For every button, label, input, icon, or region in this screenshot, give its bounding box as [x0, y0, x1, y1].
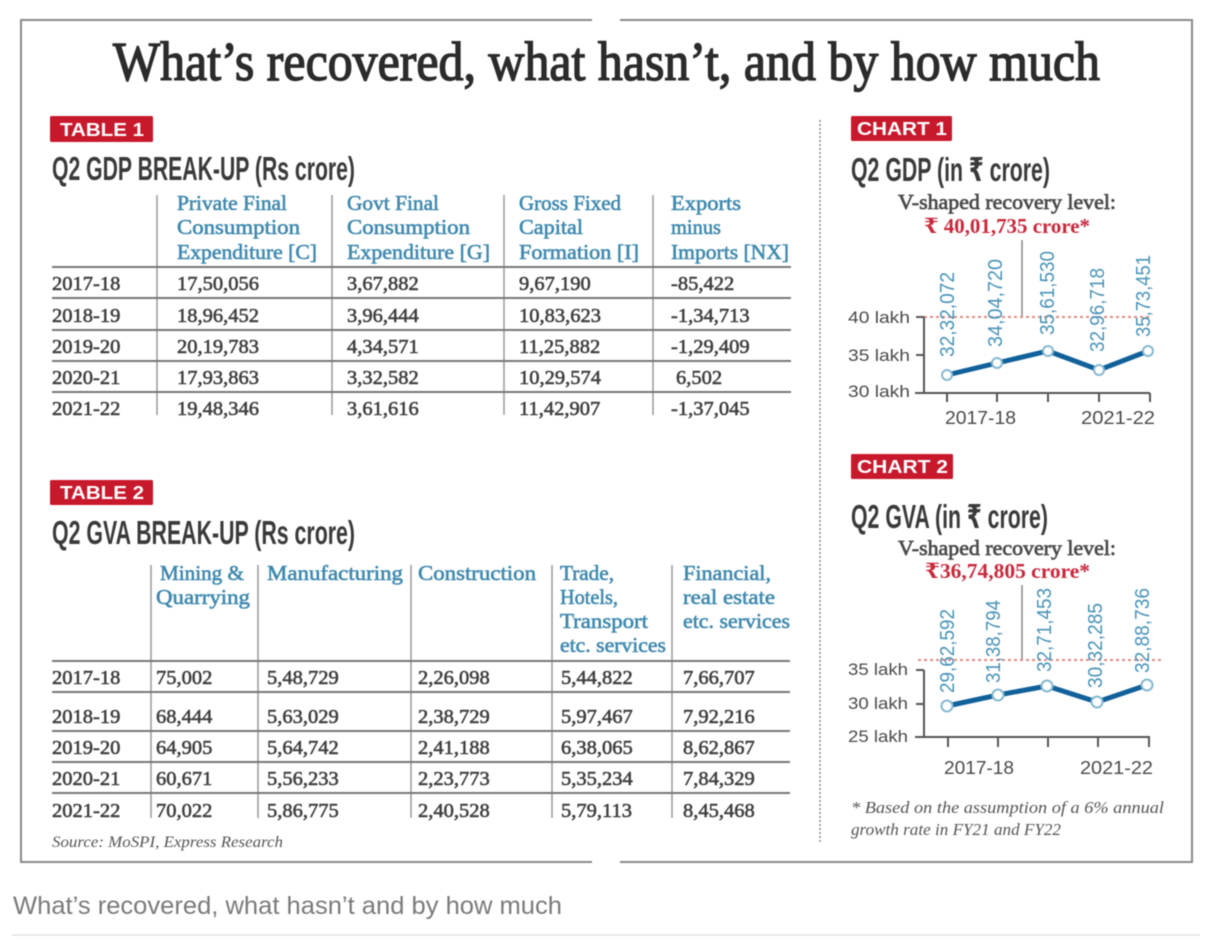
row: 2020-21: 6,502	[676, 367, 722, 389]
row: 2020-21: 17,93,863	[177, 367, 259, 389]
row: 2020-21: 10,29,574	[519, 367, 601, 389]
row: 2019-20: 20,19,783	[177, 336, 259, 358]
line chart: Q2 GDP: 2017-18	[945, 408, 1016, 428]
column headers: Consumption	[177, 215, 301, 239]
row: 2020-21: 7,84,329	[683, 768, 755, 790]
column headers: Mining &	[160, 561, 244, 585]
row: 2019-20: 64,905	[156, 737, 212, 759]
column headers: etc. services	[560, 633, 666, 657]
row: 2019-20: 11,25,882	[519, 336, 600, 358]
line chart: Q2 GDP: 30 lakh	[848, 382, 910, 401]
callout: recovery level	[898, 190, 1150, 317]
row: 2021-22: 5,86,775	[267, 800, 339, 822]
callout: recovery level: V-shaped recovery level:	[898, 536, 1116, 560]
row: 2019-20: 2019-20	[52, 737, 120, 759]
heading: chart 1: Q2 GDP (in ₹ crore)	[851, 151, 1050, 188]
row: 2018-19	[52, 706, 755, 728]
badge: table 2	[50, 480, 153, 505]
column headers: minus	[671, 215, 721, 239]
row: 2017-18: 2,26,098	[418, 667, 490, 689]
row: 2017-18: 17,50,056	[177, 273, 259, 295]
row: 2021-22: 2021-22	[52, 398, 120, 420]
column headers: Govt Final	[347, 191, 439, 215]
callout: recovery level	[898, 536, 1163, 660]
row: 2018-19	[52, 305, 750, 327]
row: 2021-22: 2021-22	[52, 800, 120, 822]
column headers: real estate	[683, 585, 775, 609]
column headers: Expenditure [C]	[177, 240, 317, 264]
column headers: Imports [NX]	[671, 240, 789, 264]
row: 2020-21: 2,23,773	[418, 768, 490, 790]
line chart: Q2 GVA: 25 lakh	[848, 727, 908, 746]
column headers: Quarrying	[156, 585, 251, 609]
line chart: Q2 GVA: 32,88,736	[1132, 588, 1154, 673]
column headers	[156, 561, 790, 657]
badge: chart 2	[851, 454, 953, 479]
row: 2018-19: 7,92,216	[683, 706, 755, 728]
row: 2021-22: 2,40,528	[418, 800, 490, 822]
row: 2019-20: 4,34,571	[347, 336, 419, 358]
footnote: * Based on the assumption of a 6% annual	[851, 798, 1164, 817]
row: 2017-18: 7,66,707	[683, 667, 755, 689]
footnote: growth rate in FY21 and FY22	[851, 820, 1061, 839]
row: 2019-20: 8,62,867	[683, 737, 755, 759]
row: 2019-20: 5,64,742	[267, 737, 339, 759]
row: 2021-22: 8,45,468	[683, 800, 755, 822]
line chart: Q2 GVA: 31,38,794	[983, 600, 1005, 683]
column headers: Financial,	[683, 561, 771, 585]
column headers: etc. services	[683, 609, 790, 633]
line chart: Q2 GVA: 30,32,285	[1085, 603, 1107, 688]
title: What’s recovered, what hasn’t, and by how much	[113, 31, 1100, 92]
row: 2017-18: 2017-18	[52, 667, 120, 689]
panel: chart 2	[848, 454, 1164, 839]
column headers: Manufacturing	[267, 561, 404, 585]
row: 2019-20: 2,41,188	[418, 737, 490, 759]
row: 2021-22: 19,48,346	[177, 398, 259, 420]
heading: table 2: Q2 GVA BREAK-UP (Rs crore)	[52, 514, 355, 551]
row: 2018-19: 68,444	[156, 706, 212, 728]
panel: table 1	[50, 116, 791, 420]
row: 2018-19: -1,34,713	[671, 305, 750, 327]
column headers: Transport	[560, 609, 648, 633]
row: 2018-19: 2,38,729	[418, 706, 490, 728]
badge: chart 2: CHART 2	[857, 457, 948, 477]
badge: chart 1	[851, 116, 952, 141]
footnote	[851, 798, 1164, 839]
row: 2017-18: 3,67,882	[347, 273, 419, 295]
column headers: Expenditure [G]	[347, 240, 490, 264]
row: 2020-21: 5,56,233	[267, 768, 339, 790]
column headers: Exports	[671, 191, 741, 215]
row: 2019-20	[52, 336, 750, 358]
heading: table 1: Q2 GDP BREAK-UP (Rs crore)	[52, 150, 355, 187]
row: 2020-21: 2020-21	[52, 367, 120, 389]
line chart: Q2 GVA: 35 lakh	[848, 660, 908, 679]
line chart: Q2 GVA: 32,71,453	[1034, 588, 1056, 672]
column headers: Private Final	[177, 191, 287, 215]
row: 2019-20: 2019-20	[52, 336, 120, 358]
callout: recovery level: ₹ 40,01,735 crore*	[924, 214, 1090, 238]
line chart: Q2 GDP: 40 lakh	[848, 308, 910, 327]
row: 2021-22: 70,022	[156, 800, 212, 822]
row: 2019-20	[52, 737, 755, 759]
line chart: Q2 GDP	[848, 251, 1155, 428]
row: 2017-18	[52, 667, 755, 689]
heading: chart 2: Q2 GVA (in ₹ crore)	[851, 498, 1048, 535]
row: 2018-19: 10,83,623	[519, 305, 601, 327]
row: 2020-21	[52, 768, 755, 790]
row: 2019-20: 6,38,065	[561, 737, 633, 759]
row: 2020-21: 2020-21	[52, 768, 120, 790]
panel: chart 1	[848, 116, 1155, 428]
row: 2018-19: 5,97,467	[561, 706, 633, 728]
source note: Source: MoSPI, Express Research	[52, 834, 283, 851]
column headers: Trade,	[560, 561, 614, 585]
line chart: Q2 GDP: 35 lakh	[848, 346, 910, 365]
row: 2017-18: 9,67,190	[519, 273, 591, 295]
row: 2018-19: 18,96,452	[177, 305, 259, 327]
callout: recovery level: ₹36,74,805 crore*	[925, 559, 1090, 583]
row: 2021-22	[52, 800, 755, 822]
line chart: Q2 GDP: 32,96,718	[1087, 268, 1109, 352]
column headers: Formation [I]	[519, 240, 639, 264]
row: 2020-21: 60,671	[156, 768, 212, 790]
column headers: Construction	[418, 561, 537, 585]
line chart: Q2 GDP: 35,73,451	[1133, 255, 1155, 337]
badge: table 2: TABLE 2	[60, 483, 144, 503]
column headers: Consumption	[347, 215, 471, 239]
row: 2021-22	[52, 398, 750, 420]
line chart: Q2 GVA	[848, 588, 1154, 778]
badge: table 1: TABLE 1	[60, 120, 144, 140]
line chart: Q2 GVA: 30 lakh	[848, 694, 908, 713]
line chart: Q2 GDP: 34,04,720	[985, 259, 1007, 347]
callout: recovery level: V-shaped recovery level:	[898, 190, 1116, 214]
row: 2021-22: 3,61,616	[347, 398, 419, 420]
caption: What’s recovered, what hasn’t and by how much	[13, 892, 562, 920]
row: 2021-22: 5,79,113	[561, 800, 632, 822]
row: 2017-18: 75,002	[156, 667, 212, 689]
column headers: Capital	[519, 215, 583, 239]
badge: chart 1: CHART 1	[857, 119, 947, 139]
row: 2020-21	[52, 367, 722, 389]
line chart: Q2 GDP: 2021-22	[1081, 408, 1155, 428]
column headers: Hotels,	[560, 585, 618, 609]
row: 2020-21: 5,35,234	[561, 768, 633, 790]
column headers	[177, 191, 789, 264]
line chart: Q2 GVA: 2021-22	[1080, 758, 1153, 778]
row: 2018-19: 2018-19	[52, 706, 120, 728]
row: 2017-18: 2017-18	[52, 273, 120, 295]
row: 2018-19: 3,96,444	[347, 305, 419, 327]
line chart: Q2 GVA: 29,62,592	[937, 609, 959, 693]
row: 2020-21: 3,32,582	[347, 367, 419, 389]
row: 2017-18: 5,44,822	[561, 667, 633, 689]
row: 2019-20: -1,29,409	[671, 336, 750, 358]
row: 2017-18	[52, 273, 734, 295]
line chart: Q2 GDP: 35,61,530	[1037, 251, 1059, 335]
badge: table 1	[50, 116, 153, 142]
line chart: Q2 GVA: 2017-18	[944, 758, 1014, 778]
panel: table 2	[50, 480, 790, 851]
line chart: Q2 GDP: 32,32,072	[937, 272, 959, 357]
row: 2021-22: -1,37,045	[671, 398, 750, 420]
row: 2018-19: 5,63,029	[267, 706, 339, 728]
row: 2018-19: 2018-19	[52, 305, 120, 327]
row: 2021-22: 11,42,907	[519, 398, 600, 420]
column headers: Gross Fixed	[519, 191, 621, 215]
row: 2017-18: -85,422	[671, 273, 734, 295]
row: 2017-18: 5,48,729	[267, 667, 339, 689]
